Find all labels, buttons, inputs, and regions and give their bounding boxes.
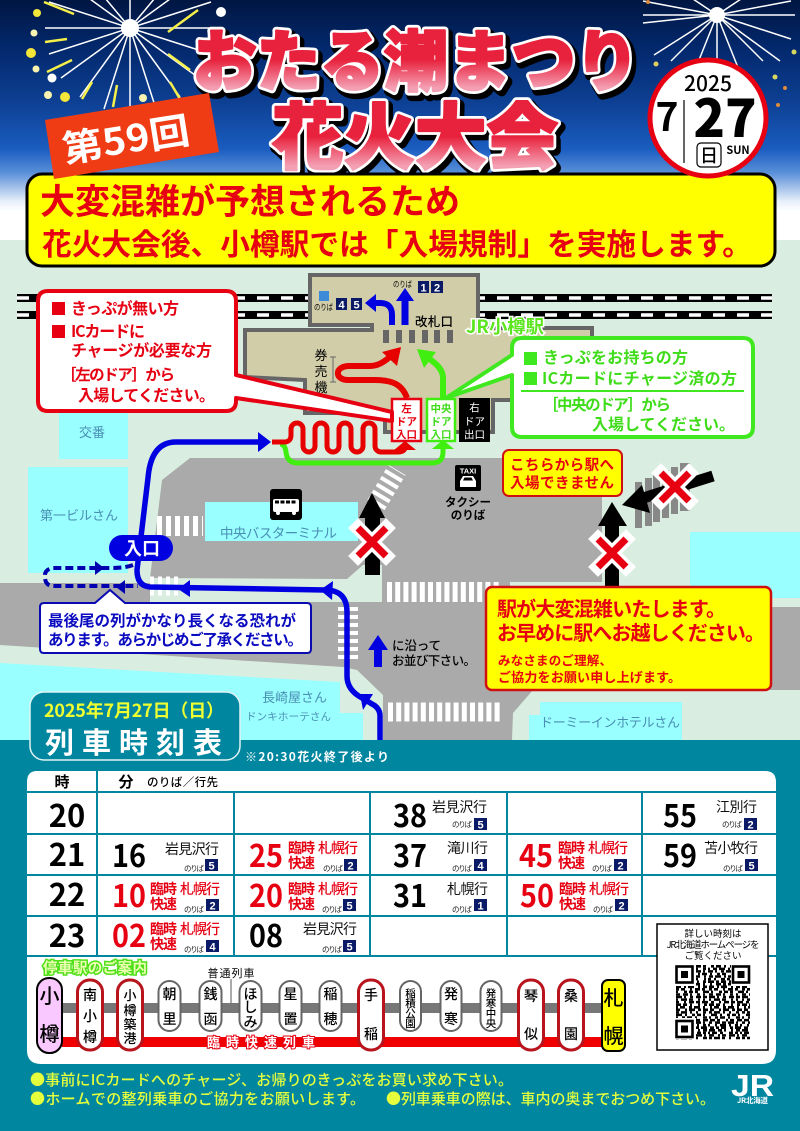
departure: 22:31: 札幌行	[447, 879, 488, 899]
teal footer background	[0, 740, 800, 1131]
label: 入口: 入口	[124, 535, 160, 561]
station: 朝里: 朝里	[162, 984, 176, 1029]
station: 桑園	[558, 980, 584, 1050]
callout: crowding notice: みなさまのご理解、	[498, 650, 612, 669]
departure: 22:10 rapid: 臨時	[150, 879, 177, 899]
main timetable and route panel	[27, 771, 776, 1064]
station: 稲積公園: 稲積公園	[405, 986, 416, 1031]
door: center entrance	[427, 399, 455, 442]
departure: 22:10 rapid: 快速	[150, 894, 177, 914]
departure: 21:45 rapid	[519, 831, 628, 876]
station: 稲穂: 稲穂	[324, 984, 338, 1029]
callout: no entry here: こちらから駅へ	[510, 454, 614, 475]
departure: 22:50 rapid: 50	[520, 871, 554, 916]
headline banner: 大変混雑が予想されるため	[40, 174, 460, 225]
label: 交番: 交番	[79, 422, 105, 441]
callout: queue warning: あります。あらかじめご了承ください。	[48, 628, 303, 650]
door: right exit: ドア	[464, 414, 485, 429]
title: おたる潮まつり: おたる潮まつり	[193, 9, 639, 105]
departure: 21:45 rapid: 快速	[558, 853, 585, 873]
departure: 22:10 rapid: 2	[209, 900, 216, 912]
departure: 21:37: 滝川行	[447, 838, 488, 858]
station: 星置	[280, 981, 302, 1031]
label: 普通列車	[208, 965, 254, 1003]
label: 券売機	[314, 345, 336, 396]
red route inside station	[338, 347, 407, 398]
label: 臨時快速列車: 臨時快速列車	[207, 1032, 315, 1051]
door: right exit: 出口	[464, 427, 485, 442]
platform signs: 4 5: 5	[353, 300, 360, 312]
departure: 22:20 rapid: 札幌行	[318, 879, 358, 899]
departure: 21:25 rapid: のりば	[323, 863, 344, 874]
platform signs: 4 5: 4	[338, 300, 345, 312]
footer notes: ●ホームでの整列乗車のご協力をお願いします。	[30, 1088, 365, 1109]
departure: 21:37	[393, 831, 488, 876]
map: crosswalks	[150, 470, 500, 712]
date circle: 2025 7/27 Sun: SUN	[726, 142, 750, 158]
departure: 22:20 rapid: 5	[346, 900, 353, 912]
station: 小樽: 小樽	[40, 980, 60, 1047]
station: 朝里	[158, 981, 180, 1031]
logo: JR Hokkaido: JR北海道	[737, 1095, 768, 1106]
map background	[0, 240, 800, 740]
icon: taxi stand: TAXI	[460, 466, 476, 476]
icon: bus	[270, 489, 302, 520]
departure: 20:38: 38	[393, 791, 427, 836]
title: おたる潮まつり: おたる潮まつり	[196, 13, 642, 109]
label: 券売機: 券売機	[314, 345, 328, 396]
door: right exit	[459, 398, 490, 442]
callout: no entry here	[503, 450, 622, 496]
map: roads and plaza	[0, 458, 800, 740]
platform signs: 1 2: のりば	[393, 279, 412, 290]
route line: rapid (red)	[62, 1037, 604, 1047]
departure: 23:08: 岩見沢行	[303, 919, 357, 939]
callout: red, left door: 入場してください。	[78, 382, 215, 406]
departure: 22:50 rapid	[520, 871, 629, 916]
heading: 列車時刻表	[30, 692, 240, 762]
station: ほしみ: ほしみ	[244, 984, 258, 1032]
door: left entrance	[392, 399, 421, 442]
arrow: closed crossing, right	[598, 502, 627, 587]
departure: 23:02 rapid: 札幌行	[180, 919, 220, 939]
door: center entrance: 中央	[430, 401, 452, 416]
departure: 22:20 rapid	[249, 871, 358, 916]
callout: green, center door: 入場してください。	[592, 411, 735, 435]
departure: 22:20 rapid: 快速	[288, 894, 315, 914]
callout: crowding notice	[486, 587, 771, 690]
date circle: 2025 7/27 Sun: 7	[655, 87, 679, 143]
date circle: 2025 7/27 Sun: 27	[693, 77, 757, 152]
callout: crowding notice: 駅が大変混雑いたします。	[497, 593, 726, 622]
station: 稲穂	[320, 981, 342, 1031]
badge: 第59回: 第59回	[58, 100, 193, 174]
departure: 20:38: のりば	[452, 819, 472, 830]
station: 南小樽	[78, 980, 102, 1050]
map: buildings in cyan	[0, 413, 800, 740]
callout: green, center door: ICカードにチャージ済の方	[542, 365, 737, 389]
departure: 21:45 rapid: のりば	[592, 863, 612, 874]
station: 発寒	[440, 981, 462, 1031]
label: 第一ビルさん: 第一ビルさん	[40, 505, 118, 524]
station: 発寒中央	[480, 981, 502, 1031]
door: center entrance: ドア	[430, 414, 452, 429]
departure: 20:55: 55	[663, 791, 697, 836]
departure: 21:16	[112, 831, 219, 876]
callout: queue warning: 最後尾の列がかなり長くなる恐れが	[48, 609, 296, 631]
departure: 21:45 rapid: 臨時	[558, 838, 585, 858]
station: 銭函: 銭函	[204, 984, 218, 1029]
departure: 21:45 rapid: 45	[519, 831, 553, 876]
note: queue along arrow: に沿って	[392, 635, 441, 654]
departure: 22:20 rapid: 臨時	[288, 879, 315, 899]
timetable header: 分	[118, 771, 134, 792]
note: queue along arrow: お並び下さい。	[392, 650, 476, 669]
map: gray crosswalk near closed entrance	[635, 463, 690, 528]
departure: 22:50 rapid: 臨時	[559, 879, 586, 899]
departure: 22:10 rapid: 10	[112, 871, 146, 916]
station: 琴似	[518, 980, 544, 1050]
callout: green, center door: きっぷをお持ちの方	[543, 344, 688, 368]
station: 手稲: 手稲	[364, 985, 378, 1044]
logo: JR Hokkaido: JR	[731, 1068, 774, 1103]
callout: no entry here: 入場できません	[510, 472, 614, 493]
label: ドーミーインホテルさん: ドーミーインホテルさん	[540, 712, 680, 731]
station: 発寒: 発寒	[444, 984, 458, 1029]
station: 銭函	[200, 981, 222, 1031]
callout: red, left door: ICカードに	[71, 318, 145, 342]
door: left entrance: 入口	[396, 427, 417, 442]
timetable header	[54, 771, 218, 792]
note: queue along arrow	[368, 635, 476, 669]
icon: taxi stand: タクシー	[445, 494, 491, 510]
departure: 22:31: 31	[393, 871, 427, 916]
callout: crowding notice: お早めに駅へお越しください。	[497, 617, 765, 646]
departure: 21:16: のりば	[184, 863, 204, 874]
departure: 21:59: のりば	[723, 863, 744, 874]
railway tracks	[17, 294, 772, 319]
departure: 22:50 rapid: 2	[618, 900, 625, 912]
departure: 21:37: 4	[477, 860, 484, 872]
departure: 22:20 rapid: のりば	[322, 904, 342, 915]
date circle: 2025 7/27 Sun: 日	[700, 142, 718, 168]
timetable header: のりば／行先	[147, 774, 218, 790]
station: 小樽築港	[118, 980, 142, 1050]
callout: red, left door: ［左のドア］から	[61, 363, 175, 385]
station: 小樽築港: 小樽築港	[123, 985, 137, 1047]
station: 稲積公園	[400, 981, 421, 1031]
departure: 21:16: 16	[112, 831, 146, 876]
label: 中央バスターミナル: 中央バスターミナル	[220, 522, 337, 542]
ticket gates: 改札口	[383, 311, 453, 343]
hour labels	[49, 791, 85, 956]
heading: 停車駅のご案内: 停車駅のご案内	[43, 957, 147, 978]
callout: queue warning	[40, 590, 311, 653]
label: ドンキホーテさん: ドンキホーテさん	[246, 709, 331, 724]
departure: 22:31: 1	[477, 900, 484, 912]
night sky background	[0, 0, 800, 240]
departure: 20:55	[663, 791, 757, 836]
departure: 23:08	[249, 911, 357, 956]
departure: 23:08: 08	[249, 911, 283, 956]
firework: left burst	[26, 0, 226, 110]
label: 普通列車: 普通列車	[208, 965, 254, 981]
departure: 22:31: のりば	[452, 904, 472, 915]
door: right exit: 右	[469, 400, 480, 415]
note: 20:30: ※20:30花火終了後より	[245, 748, 389, 765]
title: 花火大会: 花火大会	[272, 79, 558, 184]
label: 長崎屋さん: 長崎屋さん	[262, 687, 327, 706]
date circle: 2025 7/27 Sun: 2025	[684, 68, 732, 98]
route line: local (gray)	[62, 1003, 604, 1013]
departure: 20:38: 岩見沢行	[432, 797, 487, 817]
platform signs: 1 2	[393, 279, 443, 294]
departure: 21:25 rapid	[249, 831, 358, 876]
station: ほしみ	[240, 981, 262, 1032]
callout: crowding notice: ご協力をお願い申し上げます。	[498, 667, 681, 686]
station: 札幌: 札幌	[604, 982, 624, 1049]
arrow: closed crossing, center	[358, 493, 386, 575]
date circle: 2025 7/27 Sun	[650, 60, 766, 176]
label: JR小樽駅: JR小樽駅	[466, 313, 544, 339]
title: おたる潮まつり: おたる潮まつり	[193, 9, 639, 105]
footer notes	[30, 1069, 715, 1109]
departure: 23:02 rapid: 02	[112, 911, 146, 956]
callout: red, left door: きっぷが無い方	[71, 295, 179, 319]
departure: 21:59: 5	[748, 860, 755, 872]
QR code box: 詳しい時刻は	[684, 926, 742, 940]
departure: 22:50 rapid: 快速	[559, 894, 586, 914]
QR code box	[657, 924, 768, 1050]
departure: 21:45 rapid: 2	[617, 860, 624, 872]
footer notes: ●事前にICカードへのチャージ、お帰りのきっぷをお買い求め下さい。	[30, 1069, 513, 1090]
departure: 21:25 rapid: 2	[347, 860, 354, 872]
departure: 23:08: 5	[346, 942, 353, 954]
heading: 列車時刻表: 列車時刻表	[45, 720, 222, 762]
door: center entrance: 入口	[430, 427, 452, 442]
departure: 20:38: 5	[477, 820, 484, 832]
departure: 23:02 rapid: 快速	[150, 934, 177, 954]
station: 桑園: 桑園	[564, 986, 578, 1044]
departure: 21:59: 苫小牧行	[704, 838, 758, 858]
departure: 22:10 rapid: 札幌行	[180, 879, 220, 899]
platform signs: 1 2: 1	[420, 282, 427, 294]
departure: 21:25 rapid: 快速	[288, 853, 315, 873]
departure: 23:02 rapid: のりば	[184, 944, 204, 955]
departure: 23:02 rapid: 臨時	[150, 919, 177, 939]
hour labels: 20	[49, 791, 85, 836]
QR code box: ご覧ください	[684, 948, 742, 962]
departure: 21:25 rapid: 札幌行	[318, 838, 358, 858]
departure: 20:55: 2	[747, 820, 754, 832]
timetable grid	[27, 771, 776, 956]
departure: 22:20 rapid: 20	[249, 871, 283, 916]
door: left entrance: ドア	[396, 414, 417, 429]
label: 入口	[109, 535, 173, 561]
departure: 22:31	[393, 871, 488, 916]
departure: 20:38	[393, 791, 487, 836]
headline banner	[27, 174, 775, 266]
timetable header: 時	[54, 771, 70, 792]
departure: 22:10 rapid: のりば	[184, 904, 204, 915]
badge: 第59回	[45, 93, 219, 179]
departure: 21:16: 5	[208, 860, 215, 872]
station: 南小樽: 南小樽	[83, 985, 97, 1047]
departure: 21:59	[663, 831, 758, 876]
ticket gates: 改札口: 改札口	[415, 311, 453, 330]
departure: 20:55: のりば	[722, 819, 742, 830]
green route inside station	[417, 349, 443, 398]
callout: red, left door	[38, 291, 392, 421]
departure: 23:08: のりば	[322, 944, 342, 955]
callout: green, center door	[446, 338, 753, 437]
route: green queue to center door	[280, 440, 454, 463]
headline banner: 花火大会後、小樽駅では「入場規制」を実施します。	[42, 220, 752, 264]
departure: 21:16: 岩見沢行	[165, 839, 219, 859]
route: dashed queue tail	[45, 561, 138, 594]
platform signs: 4 5: のりば	[314, 302, 333, 313]
departure: 21:45 rapid: 札幌行	[588, 838, 628, 858]
QR code box: JR北海道ホームページを	[666, 937, 760, 951]
departure: 23:02 rapid: 4	[209, 942, 216, 954]
icon: taxi stand: のりば	[451, 507, 486, 523]
hour labels: 22	[49, 870, 85, 915]
platform signs: 1 2: 2	[434, 282, 440, 294]
departure: 21:25 rapid: 臨時	[288, 838, 315, 858]
departure: 21:37: のりば	[452, 863, 472, 874]
departure: 21:59: 59	[663, 831, 697, 876]
hour labels: 23	[49, 911, 85, 956]
station: 手稲	[358, 980, 384, 1050]
departure: 20:55: 江別行	[716, 797, 757, 817]
title: 花火大会: 花火大会	[275, 83, 561, 188]
hour labels: 21	[49, 830, 85, 875]
route: blue queue line	[137, 432, 380, 740]
arrow: closed crossing, diagonal	[622, 473, 713, 513]
station: 発寒中央: 発寒中央	[486, 986, 497, 1031]
callout: green, center door: ［中央のドア］から	[543, 393, 671, 415]
departure: 21:25 rapid: 25	[249, 831, 283, 876]
heading: 列車時刻表: 2025年7月27日（日）	[44, 697, 224, 723]
route: red queue serpentine to left door	[272, 423, 416, 452]
station building	[245, 275, 592, 432]
station: 琴似: 琴似	[524, 986, 538, 1044]
departure: 22:50 rapid: のりば	[593, 904, 614, 915]
platform signs: 4 5	[314, 291, 362, 313]
title: 花火大会: 花火大会	[272, 79, 558, 184]
door: left entrance: 左	[401, 401, 412, 416]
departure: 22:10 rapid	[112, 871, 220, 916]
icon: taxi stand	[445, 465, 491, 523]
callout: red, left door: チャージが必要な方	[71, 337, 212, 361]
firework: right burst	[643, 0, 796, 107]
footer notes: ●列車乗車の際は、車内の奥までおつめ下さい。	[386, 1088, 715, 1109]
departure: 21:37: 37	[393, 831, 427, 876]
departure: 22:50 rapid: 札幌行	[589, 879, 629, 899]
departure: 23:02 rapid	[112, 911, 220, 956]
blue arrows to platforms	[365, 288, 414, 325]
station: 星置: 星置	[284, 984, 298, 1029]
